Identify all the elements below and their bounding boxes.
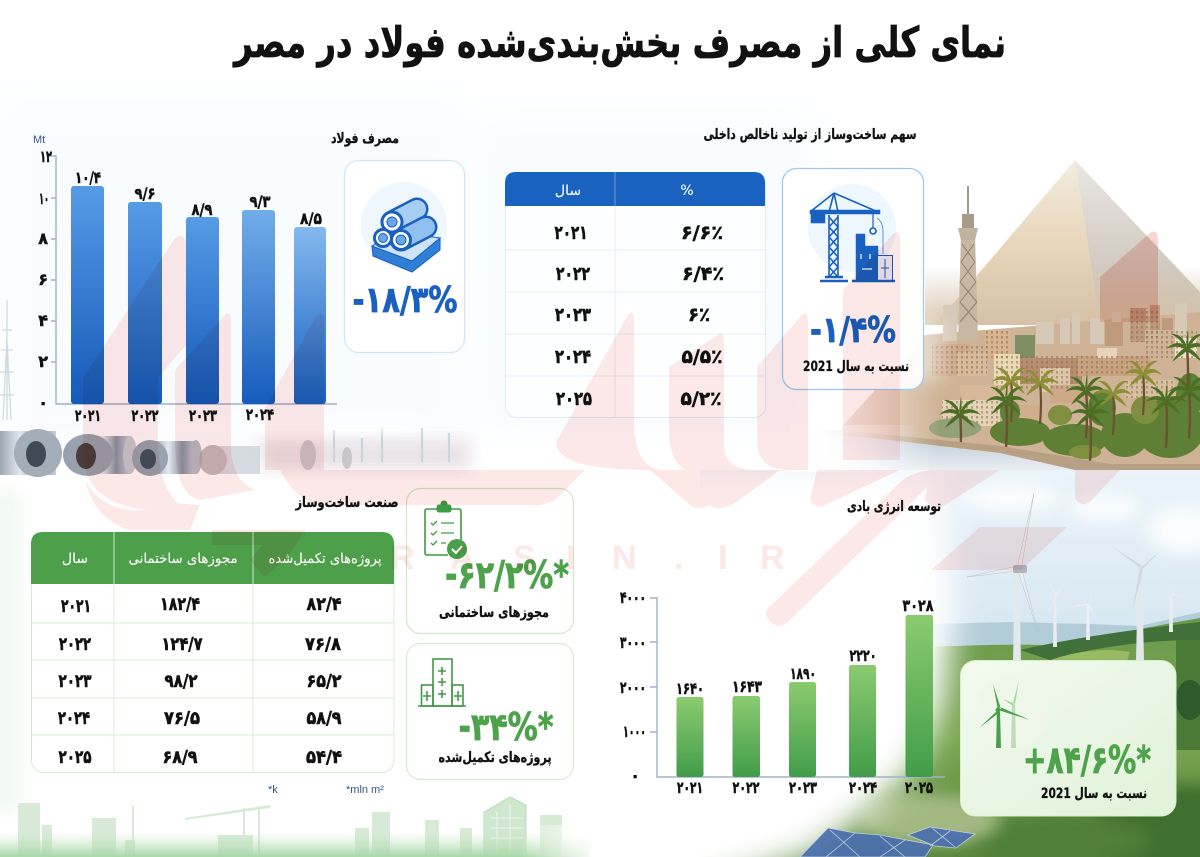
table rows: ۶۵/۲ [306,671,342,692]
table rows: ۵۸/۹ [306,708,342,729]
bars [71,186,326,404]
value labels: ۱۶۴۰ [676,679,704,698]
value: -۱۸/۳% [352,280,458,321]
caption: نسبت به سال 2021 [1041,786,1147,802]
coil 2 [63,434,137,476]
sky [700,470,1200,650]
watermark text: R [390,539,415,577]
table rows: ۲۰۲۴ [58,708,90,729]
y axis [620,588,945,785]
fade below section [790,425,920,472]
left fade over city [815,170,940,470]
value labels: ۱۸۹۰ [790,664,816,683]
table rows: ۲۰۲۲ [59,634,91,655]
card: construction share change [782,168,924,390]
watermark text [390,539,785,577]
left pylon [0,300,14,420]
distant haze hills [700,612,1200,650]
table rows: ۸۲/۴ [306,594,342,615]
watermark text: I [718,539,727,577]
table header: پروژه‌های تکمیل‌شده [268,551,382,567]
green hills [700,618,1200,857]
watermark [83,232,1158,626]
table header [505,172,765,206]
y axis: ۱۰ [39,189,49,208]
table header: مجوزهای ساختمانی [128,551,238,567]
value labels: ۳۰۲۸ [902,596,934,615]
bars [676,615,933,777]
table: construction industry [31,532,394,773]
table header: سال [555,183,581,199]
icon: green buildings [418,659,466,706]
coil 1 [0,429,62,477]
Cairo tower [958,186,978,340]
table rows: ۶/۴٪ [682,263,724,285]
watermark text: R [760,539,785,577]
value labels [676,596,934,698]
value labels: ۲۲۲۰ [850,646,876,665]
y axis [33,134,337,412]
icon: clipboard checklist [425,501,467,559]
value: -۳۴%* [458,705,554,749]
value: +۸۴/۶%* [1023,738,1151,782]
wind turbines [967,493,1190,662]
scene: faint skyline at bottom left [0,797,600,857]
table rows: ۶۸/۹ [162,747,198,768]
coil 4 [199,445,260,475]
table rows: ۶/۶٪ [681,222,723,244]
table rows: ۶٪ [688,304,710,326]
table rows: ۷۶/۸ [305,634,341,655]
caption: پروژه‌های تکمیل‌شده [438,750,552,766]
y axis: ۲۰۰۰ [620,678,646,697]
year labels [75,405,274,425]
scene: steel coils and refinery [0,300,470,477]
year labels: ۲۰۲۴ [849,778,877,797]
icon: wind turbine [979,680,1030,748]
watermark text: . [674,539,683,577]
left fade for scene [560,470,955,857]
year labels: ۲۰۲۳ [789,778,817,797]
soft background tint [0,100,810,810]
table header: % [680,183,694,199]
table header: سال [62,551,88,567]
unit notes [268,784,384,796]
card: completed projects [406,644,574,780]
card: wind energy change [960,660,1176,816]
year labels: ۲۰۲۴ [246,405,274,424]
table rows: ۲۰۲۲ [556,263,590,285]
caption: نسبت به سال 2021 [803,359,909,375]
value labels: ۹/۶ [134,184,156,203]
unit notes: *mln m² [346,784,384,796]
year labels: ۲۰۲۱ [677,778,703,797]
year labels: ۲۰۲۲ [732,778,760,797]
table rows: ۲۰۲۳ [555,304,591,326]
y axis: Mt [33,134,45,146]
year labels: ۲۰۲۲ [132,406,159,425]
watermark text: N [612,539,637,577]
value labels: ۹/۳ [250,192,271,211]
y axis: ۸ [38,229,48,248]
Nile river and shore [815,432,1075,470]
heading: steel consumption: مصرف فولاد [331,131,399,147]
table rows: ۵/۲٪ [680,388,722,410]
table rows: ۲۰۲۵ [58,747,92,768]
refinery silhouettes [260,428,470,470]
table: construction share of GDP [505,172,766,418]
y axis: ۴۰۰۰ [620,588,646,607]
table rows: ۵/۵٪ [682,346,722,368]
year labels [677,778,933,797]
watermark text: S [513,539,536,577]
y axis: ۰ [38,393,48,412]
y axis: ۴ [38,311,48,330]
year labels: ۲۰۲۳ [189,406,217,425]
table rows: ۵۴/۴ [306,747,342,768]
heading: construction share of GDP: سهم ساخت‌وساز از تولید ناخالص داخلی [704,127,916,143]
table rows: ۱۸۲/۴ [160,594,200,615]
table rows: ۲۰۲۵ [556,388,592,410]
pyramid [935,160,1200,325]
watermark text: I [566,539,575,577]
value labels: ۸/۵ [300,209,322,228]
table rows: ۲۰۲۳ [58,671,92,692]
table rows [505,206,765,418]
table rows: ۲۰۲۱ [554,222,588,244]
value labels: ۸/۹ [192,200,213,219]
city buildings [838,303,1200,470]
y axis: ۱۰۰۰ [623,722,646,741]
table rows [31,584,394,773]
value: -۱/۴% [810,310,896,351]
palm groves [929,330,1200,461]
table rows: ۱۲۴/۷ [162,634,203,655]
solar panels [800,827,975,857]
y axis: ۱۲ [40,147,52,166]
value: -۶۲/۲%* [445,553,569,597]
caption: مجوزهای ساختمانی [439,605,549,621]
icon: steel pipes [372,209,440,272]
value labels: ۱۰/۴ [75,168,101,187]
table rows: ۷۶/۵ [164,708,200,729]
y axis: ۲ [38,352,48,371]
unit notes: *k [268,784,278,796]
bar chart: steel consumption [33,134,337,425]
coil 3 [132,440,202,476]
y axis: ۶ [38,270,48,289]
year labels: ۲۰۲۱ [75,406,101,425]
y axis: ۳۰۰۰ [620,633,646,652]
year labels: ۲۰۲۵ [905,778,933,797]
watermark logo strokes [83,232,1158,626]
card: steel change [344,160,464,352]
watermark text: A [450,539,475,577]
heading: construction industry: صنعت ساخت‌وساز [295,495,398,511]
icon: tower crane [810,193,895,281]
y axis: ۰ [630,766,640,785]
table rows: ۲۰۲۱ [61,596,91,617]
scene: wind farm landscape [560,470,1200,857]
clouds [960,484,1200,554]
heading: wind energy development: توسعه انرژی بادی [847,499,941,515]
value labels: ۱۶۴۳ [732,677,762,696]
bar chart: wind energy [620,588,945,797]
scene: Cairo with pyramid and tower [790,160,1200,472]
card: building permits [406,488,574,634]
table rows: ۹۸/۲ [164,671,198,692]
value labels [75,168,322,228]
table rows: ۲۰۲۴ [555,346,591,368]
table header [31,532,394,584]
